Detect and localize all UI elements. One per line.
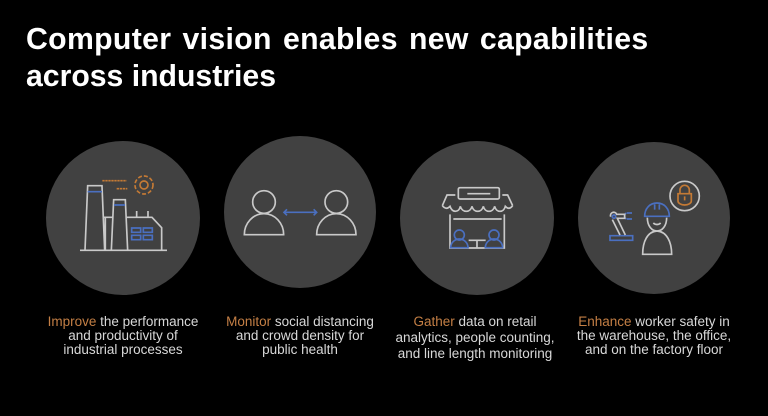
text: improve: industrial processes bbox=[63, 342, 183, 356]
icon: storefront bbox=[442, 188, 513, 248]
panel: distancing circle bbox=[224, 136, 376, 288]
text: gather: and line length monitoring bbox=[398, 346, 552, 361]
text: monitor bbox=[226, 314, 374, 357]
text: enhance: Enhance worker safety in bbox=[578, 314, 730, 328]
panel: factory circle bbox=[46, 141, 200, 295]
text: gather bbox=[395, 314, 555, 361]
text: improve: Improve the performance bbox=[48, 314, 198, 328]
text: enhance bbox=[577, 314, 731, 357]
text: monitor: Monitor social distancing bbox=[226, 314, 374, 328]
icon: two people with arrow bbox=[244, 191, 356, 235]
icon: factory bbox=[80, 176, 167, 250]
text: improve: and productivity of bbox=[68, 328, 178, 342]
icon: worker, robot arm and lock bbox=[610, 181, 699, 254]
text: monitor: public health bbox=[262, 342, 338, 356]
text: gather: Gather data on retail bbox=[413, 314, 537, 329]
text: enhance: the warehouse, the office, bbox=[577, 328, 731, 342]
title: Computer vision enables new capabilities bbox=[26, 23, 648, 56]
text: monitor: and crowd density for bbox=[236, 328, 364, 342]
text: enhance: and on the factory floor bbox=[585, 342, 723, 356]
text: gather: analytics, people counting, bbox=[395, 330, 555, 345]
panel: safety circle bbox=[578, 142, 730, 294]
title: across industries bbox=[26, 60, 276, 93]
text: improve bbox=[48, 314, 198, 357]
title bbox=[26, 23, 648, 93]
panel: retail circle bbox=[400, 141, 554, 295]
